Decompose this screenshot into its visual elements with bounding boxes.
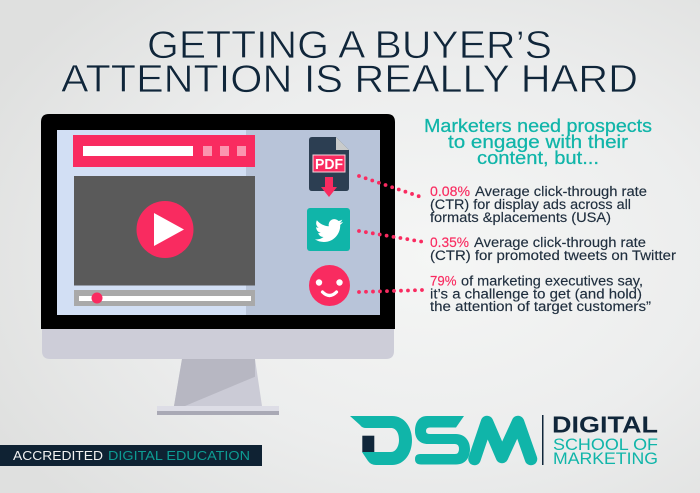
badge: accredited digital education: DIGITAL EDUCATION <box>108 448 250 463</box>
heading: marketers need prospects: to engage with their <box>448 132 628 152</box>
stat: marketing executives: the attention of target customers” <box>430 299 651 314</box>
stat: marketing executives: of marketing executives say, <box>461 274 643 288</box>
heading: marketers need prospects <box>424 116 652 168</box>
dotted connector: smiley to stat <box>359 290 424 292</box>
icon: smiley face <box>309 265 350 306</box>
logo divider <box>542 415 544 465</box>
stat: display ads CTR: (CTR) for display ads across all <box>430 197 631 212</box>
logo mark: S <box>415 416 470 464</box>
dotted connector: PDF to stat <box>359 176 424 198</box>
title: ATTENTION IS REALLY HARD <box>61 58 638 101</box>
logo wordmark: MARKETING <box>553 450 658 468</box>
stat: promoted tweets CTR: (CTR) for promoted tweets on Twitter <box>430 248 677 263</box>
logo wordmark <box>552 412 658 468</box>
icon: Twitter bird <box>307 208 350 251</box>
stat: marketing executives: it’s a challenge to get (and hold) <box>430 286 642 302</box>
icon: play button <box>136 201 194 258</box>
stat: display ads CTR: formats &placements (USA) <box>430 210 611 225</box>
dotted connector: Twitter to stat <box>359 231 424 242</box>
title: GETTING A BUYER’S <box>147 24 552 67</box>
monitor stand <box>157 359 279 415</box>
video progress bar <box>74 290 255 306</box>
title <box>61 24 638 101</box>
stat: marketing executives <box>430 274 651 314</box>
monitor <box>41 114 395 415</box>
logo wordmark: DIGITAL <box>552 412 658 438</box>
stat: marketing executives: 79% <box>430 274 456 288</box>
logo wordmark: SCHOOL OF <box>553 436 658 454</box>
monitor screen <box>57 130 380 315</box>
video player <box>74 176 255 286</box>
heading: marketers need prospects: content, but... <box>477 148 599 168</box>
stat: promoted tweets CTR <box>430 235 677 263</box>
monitor bezel <box>41 114 395 329</box>
badge: accredited digital education <box>0 445 262 466</box>
stat: display ads CTR <box>430 184 647 225</box>
logo: DSM Digital School of Marketing <box>350 412 658 468</box>
monitor chin <box>42 329 394 359</box>
stat: display ads CTR: Average click-through rate <box>475 184 647 199</box>
stat: display ads CTR: 0.08% <box>430 184 470 199</box>
logo mark: D <box>350 416 412 465</box>
browser header bar <box>73 135 255 167</box>
stat: promoted tweets CTR: 0.35% <box>430 235 469 250</box>
stat: promoted tweets CTR: Average click-through rate <box>474 235 646 250</box>
heading: marketers need prospects: Marketers need prospects <box>424 116 652 136</box>
badge: accredited digital education: ACCREDITED <box>13 448 103 463</box>
logo mark: M <box>474 422 531 459</box>
icon: PDF document: PDF <box>315 156 343 173</box>
icon: PDF document <box>309 137 349 197</box>
